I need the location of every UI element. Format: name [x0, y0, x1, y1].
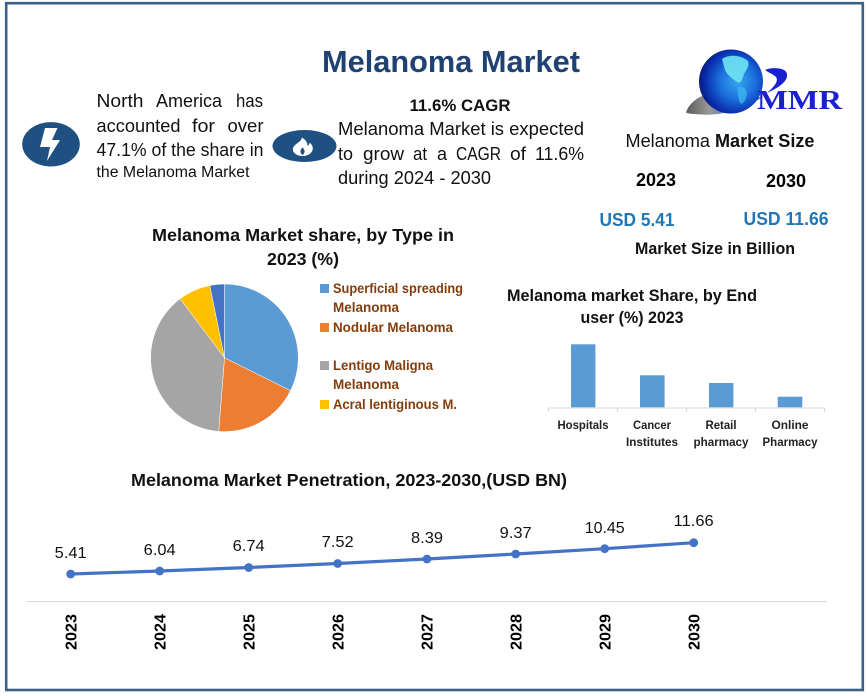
pie chart heading: [152, 225, 454, 269]
line data labels: 7.52: [322, 534, 354, 551]
text block: CAGR: 11.6%: [535, 144, 584, 164]
bar labels: Retail: [706, 418, 736, 432]
line data labels: 8.39: [411, 530, 443, 547]
icon: flame: [272, 130, 336, 162]
text block: North America share: over: [228, 116, 264, 136]
pie legend: Nodular Melanoma: [333, 320, 453, 335]
year axis labels: [64, 614, 704, 650]
text block: CAGR: Melanoma Market is expected: [338, 119, 584, 139]
logo: MMR globe: MMR: [757, 85, 843, 115]
pie legend: Acral lentiginous M.: [333, 397, 457, 412]
text block: CAGR: to: [338, 144, 353, 164]
line data labels: 6.04: [144, 542, 176, 559]
text block: CAGR: at: [413, 144, 427, 164]
bar labels: pharmacy: [694, 435, 749, 449]
heading: market size: Melanoma Market Size: [626, 131, 814, 151]
pie chart: [151, 284, 298, 432]
pie legend: Melanoma: [333, 377, 399, 392]
bar chart heading: Melanoma market Share, by End: [507, 286, 757, 305]
text block: CAGR: 11.6% CAGR: [410, 96, 510, 115]
pie legend: Superficial spreading: [333, 281, 463, 296]
bar labels: Institutes: [626, 435, 678, 449]
text block: North America share: [96, 91, 264, 181]
value 2030: USD 11.66: [744, 209, 828, 229]
year axis labels: 2027: [420, 614, 436, 650]
pie legend: [320, 281, 463, 412]
year axis labels: 2028: [508, 614, 526, 650]
pie legend: Melanoma: [333, 300, 399, 315]
value 2023: USD 5.41: [600, 210, 674, 230]
market size values: [600, 170, 828, 258]
text block: North America share: America: [156, 91, 223, 111]
text block: CAGR: CAGR: [456, 144, 501, 164]
year axis labels: 2025: [242, 614, 258, 650]
bar labels: Cancer: [633, 418, 671, 432]
text block: CAGR: a: [437, 144, 448, 164]
text block: North America share: the Melanoma Market: [96, 164, 250, 181]
text block: North America share: 47.1% of the share in: [96, 140, 264, 160]
line data labels: 5.41: [55, 545, 87, 562]
bar chart heading: user (%) 2023: [580, 308, 684, 327]
text block: CAGR: [338, 96, 584, 188]
year axis labels: 2029: [598, 614, 614, 650]
line data labels: 6.74: [233, 538, 265, 555]
bar labels: [558, 418, 818, 449]
line data labels: 11.66: [674, 513, 714, 530]
line chart heading: Melanoma Market Penetration, 2023-2030,(USD BN): [131, 470, 567, 490]
caption: Market Size in Billion: [635, 240, 795, 258]
bar chart heading: [507, 286, 757, 327]
year axis labels: 2023: [64, 614, 80, 650]
text block: North America share: accounted: [96, 116, 180, 136]
bar labels: Pharmacy: [762, 435, 818, 449]
bar chart: [548, 344, 824, 449]
year axis labels: 2030: [686, 614, 704, 650]
pie legend: Lentigo Maligna: [333, 358, 433, 373]
logo: MMR globe: [686, 50, 843, 115]
year 2030: 2030: [766, 171, 806, 191]
title: Melanoma Market: [322, 45, 580, 79]
bar labels: Online: [772, 418, 809, 432]
year axis labels: 2026: [330, 614, 348, 650]
pie chart heading: Melanoma Market share, by Type in: [152, 225, 454, 245]
year 2023: 2023: [636, 170, 676, 190]
bar labels: Hospitals: [558, 418, 609, 432]
icon: lightning bolt: [22, 122, 80, 166]
text block: North America share: has: [236, 91, 263, 111]
text block: CAGR: of: [510, 144, 527, 164]
text block: CAGR: grow: [363, 144, 405, 164]
text block: North America share: North: [96, 91, 144, 111]
line data labels: 9.37: [500, 525, 532, 542]
line chart: [26, 513, 827, 650]
year axis labels: 2024: [152, 614, 170, 650]
text block: CAGR: during 2024 - 2030: [338, 168, 491, 188]
text block: North America share: for: [192, 116, 215, 136]
line data labels: 10.45: [585, 520, 625, 537]
line data labels: [55, 513, 714, 562]
pie chart heading: 2023 (%): [267, 249, 339, 269]
